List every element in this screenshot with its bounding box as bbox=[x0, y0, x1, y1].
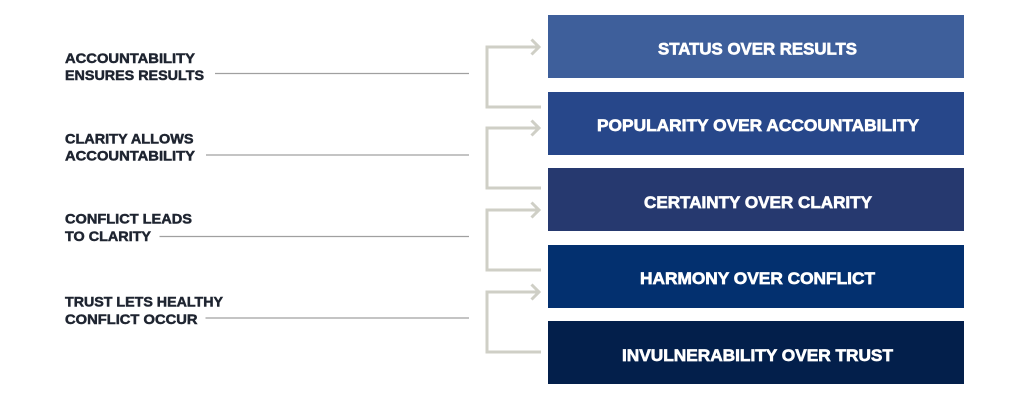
box: harmony over conflict: HARMONY OVER CONFLICT bbox=[640, 270, 875, 288]
label: trust lets healthy conflict occur bbox=[65, 294, 469, 327]
box: harmony over conflict bbox=[548, 245, 964, 308]
label: conflict leads to clarity bbox=[65, 210, 469, 244]
box: status over results bbox=[548, 15, 964, 78]
arrow: harmony to certainty bbox=[487, 202, 541, 270]
label: trust lets healthy conflict occur: TRUST LETS HEALTHY bbox=[65, 294, 224, 310]
arrow: invulnerability to harmony bbox=[487, 284, 541, 352]
arrow: certainty to popularity bbox=[487, 120, 541, 188]
label: clarity allows accountability: CLARITY ALLOWS bbox=[65, 130, 194, 146]
label: conflict leads to clarity: TO CLARITY bbox=[65, 228, 152, 244]
box: invulnerability over trust bbox=[548, 321, 964, 384]
label: trust lets healthy conflict occur: CONFLICT OCCUR bbox=[65, 311, 198, 327]
label: accountability ensures results: ACCOUNTABILITY bbox=[65, 50, 196, 66]
box: popularity over accountability: POPULARITY OVER ACCOUNTABILITY bbox=[597, 117, 919, 135]
label: accountability ensures results: ENSURES RESULTS bbox=[65, 67, 204, 83]
label: accountability ensures results bbox=[65, 50, 469, 83]
box: certainty over clarity: CERTAINTY OVER CLARITY bbox=[644, 194, 872, 212]
arrow: popularity to status bbox=[487, 40, 541, 107]
box: certainty over clarity bbox=[548, 168, 964, 231]
box: invulnerability over trust: INVULNERABILITY OVER TRUST bbox=[622, 347, 893, 365]
label: clarity allows accountability: ACCOUNTABILITY bbox=[65, 148, 196, 164]
label: conflict leads to clarity: CONFLICT LEADS bbox=[65, 210, 192, 226]
label: clarity allows accountability bbox=[65, 130, 469, 164]
box: status over results: STATUS OVER RESULTS bbox=[658, 40, 857, 58]
box: popularity over accountability bbox=[548, 92, 964, 155]
